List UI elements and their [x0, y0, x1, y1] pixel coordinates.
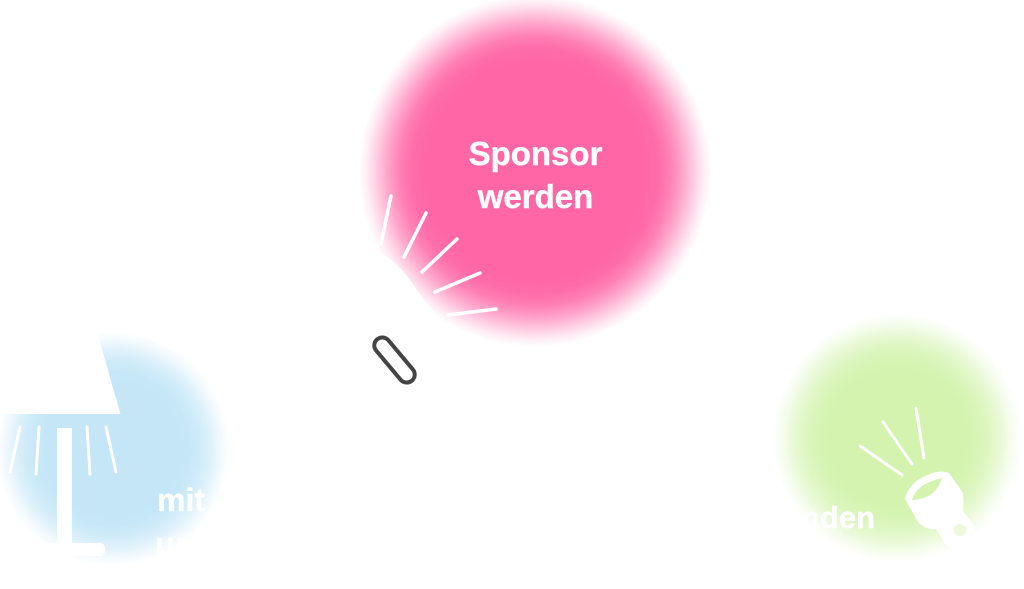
lamp shade: [0, 320, 120, 414]
icon: flashlight rays: [860, 408, 924, 475]
icon: lamp rays: [10, 427, 116, 474]
lamp pole: [57, 428, 72, 558]
green glow: [773, 314, 1021, 562]
blue glow: [0, 332, 230, 566]
icon: lamp: [0, 320, 120, 558]
label: nden: nden: [801, 500, 875, 535]
panel: sponsor circle: [340, 0, 711, 400]
heading: sponsor: Sponsor: [469, 135, 603, 172]
icon: flashlight rays: [381, 196, 496, 315]
flashlight body: [905, 472, 976, 552]
panel: blue circle: [0, 320, 230, 566]
pink glow: [359, 0, 711, 347]
icon: flashlight switch: [371, 334, 418, 386]
flashlight lens: [912, 478, 942, 500]
label: un: un: [155, 526, 195, 562]
heading: werden: werden: [477, 178, 593, 215]
panel: green circle: [773, 314, 1021, 562]
label: mit: mit: [157, 482, 205, 518]
flashlight body cutout: [340, 225, 450, 400]
flashlight hole: [954, 524, 966, 536]
icon: flashlight: [905, 472, 976, 552]
lamp base: [40, 543, 105, 556]
